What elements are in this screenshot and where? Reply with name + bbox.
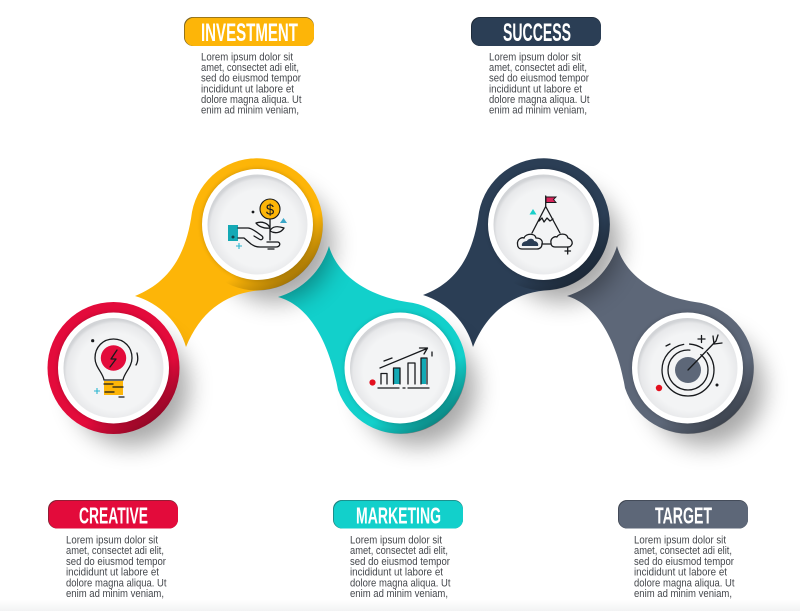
step: marketing shape bbox=[278, 246, 476, 446]
icon: light bulb bbox=[91, 339, 138, 397]
text: success description: amet, consectet adi elit, bbox=[489, 62, 587, 74]
text: marketing description: sed do eiusmod tempor bbox=[350, 556, 450, 568]
text: target description: Lorem ipsum dolor sit bbox=[634, 534, 726, 546]
badge: success bbox=[471, 17, 601, 47]
icon: hand holding money plant bbox=[228, 199, 287, 249]
text: investment description: Lorem ipsum dolor sit bbox=[201, 52, 293, 64]
text: marketing description: dolore magna aliqua. Ut bbox=[350, 577, 451, 589]
text: investment description bbox=[201, 52, 302, 116]
text: marketing description bbox=[350, 534, 451, 600]
text: investment description: sed do eiusmod tempor bbox=[201, 73, 301, 85]
text: target description: amet, consectet adi elit, bbox=[634, 545, 732, 557]
text: success description: dolore magna aliqua. Ut bbox=[489, 94, 590, 106]
text: success description bbox=[489, 52, 590, 116]
step: investment shape bbox=[135, 158, 333, 347]
text: target description: dolore magna aliqua. Ut bbox=[634, 577, 735, 589]
step: target shape bbox=[567, 246, 764, 446]
text: creative description: enim ad minim veniam, bbox=[66, 588, 164, 600]
text: creative description: dolore magna aliqua. Ut bbox=[66, 577, 167, 589]
badge: marketing bbox=[333, 500, 463, 528]
text: creative description bbox=[66, 534, 167, 600]
badge: creative: CREATIVE bbox=[79, 502, 148, 528]
text: creative description: amet, consectet adi elit, bbox=[66, 545, 164, 557]
badge: marketing: MARKETING bbox=[356, 502, 441, 528]
text: creative description: sed do eiusmod tempor bbox=[66, 556, 166, 568]
text: creative description: Lorem ipsum dolor sit bbox=[66, 534, 158, 546]
text: success description: enim ad minim veniam, bbox=[489, 104, 587, 116]
badge: success: SUCCESS bbox=[503, 19, 571, 47]
text: marketing description: amet, consectet adi elit, bbox=[350, 545, 448, 557]
step: creative circle bbox=[48, 302, 189, 446]
badge: target bbox=[618, 500, 748, 528]
text: success description: sed do eiusmod tempor bbox=[489, 73, 589, 85]
icon: rising bar chart bbox=[369, 348, 432, 388]
text: investment description: dolore magna aliqua. Ut bbox=[201, 94, 302, 106]
badge: investment: INVESTMENT bbox=[201, 19, 298, 47]
icon: target with arrow bbox=[656, 335, 722, 396]
text: marketing description: incididunt ut labore et bbox=[350, 567, 443, 579]
text: investment description: amet, consectet adi elit, bbox=[201, 62, 299, 74]
text: investment description: incididunt ut labore et bbox=[201, 83, 294, 95]
text: target description: sed do eiusmod tempor bbox=[634, 556, 734, 568]
badge: creative bbox=[48, 500, 178, 528]
text: investment description: enim ad minim veniam, bbox=[201, 104, 299, 116]
badge: target: TARGET bbox=[655, 502, 712, 528]
text: target description: enim ad minim veniam, bbox=[634, 588, 732, 600]
icon: hand holding money plant: $ bbox=[266, 202, 275, 218]
text: creative description: incididunt ut labore et bbox=[66, 567, 159, 579]
text: target description: incididunt ut labore et bbox=[634, 567, 727, 579]
text: target description bbox=[634, 534, 735, 600]
step: success shape bbox=[423, 158, 620, 347]
text: marketing description: Lorem ipsum dolor sit bbox=[350, 534, 442, 546]
icon: mountain with flag and clouds bbox=[517, 196, 572, 254]
text: success description: incididunt ut labore et bbox=[489, 83, 582, 95]
badge: investment bbox=[184, 17, 314, 47]
text: marketing description: enim ad minim veniam, bbox=[350, 588, 448, 600]
text: success description: Lorem ipsum dolor sit bbox=[489, 52, 581, 64]
